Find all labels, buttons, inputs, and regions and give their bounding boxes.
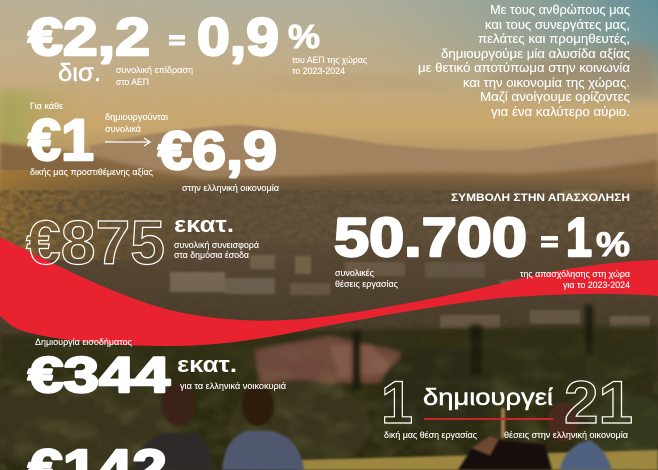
value 1 outlined: 1 (381, 369, 413, 436)
intro paragraph: με θετικό αποτύπωμα στην κοινωνία (418, 61, 630, 75)
caption share of employment: της απασχόλησης στη χώρα (520, 269, 630, 279)
caption percent of GDP: του ΑΕΠ της χώρας (292, 55, 368, 65)
city buildings (170, 190, 650, 330)
caption public revenue: συνολική συνεισφορά (174, 240, 259, 250)
people: couple on the right (458, 402, 612, 470)
intro paragraph: Μαζί ανοίγουμε ορίζοντες (480, 90, 630, 104)
value €1: €1 (28, 108, 94, 173)
caption GDP impact: συνολική επίδραση (116, 65, 193, 75)
intro paragraph (418, 3, 630, 119)
stat: GDP impact: στο ΑΕΠ (116, 77, 149, 87)
intro paragraph: για ένα καλύτερο αύριο. (491, 105, 630, 119)
value €344: €344 (28, 347, 170, 403)
word creates: δημιουργεί (423, 384, 553, 410)
intro paragraph: δημιουργούμε μία αλυσίδα αξίας (441, 47, 630, 61)
red underline (424, 418, 553, 420)
stat: employment: θέσεις εργασίας (335, 279, 399, 289)
stat: GDP impact: το 2023-2024 (292, 66, 345, 76)
stat: job multiplier (381, 369, 633, 440)
stat: employment: για το 2023-2024 (563, 280, 630, 290)
stat: public revenue (26, 209, 259, 278)
caption greek economy: στην ελληνική οικονομία (182, 183, 279, 193)
caption total jobs: συνολικές (335, 268, 375, 278)
stat: GDP impact (28, 8, 368, 87)
percent sign: % (288, 18, 320, 55)
stat: multiplier (28, 101, 279, 193)
heading: ΣΥΜΒΟΛΗ ΣΤΗΝ ΑΠΑΣΧΟΛΗΣΗ (451, 192, 630, 204)
intro paragraph: πελάτες και προμηθευτές, (478, 32, 630, 46)
percent sign: % (596, 226, 630, 264)
intro paragraph: Με τους ανθρώπους μας (490, 3, 630, 17)
stat: income creation (28, 337, 286, 470)
caption own job: δική μας θέση εργασίας (384, 430, 478, 440)
value €6,9: €6,9 (158, 121, 277, 181)
unit εκατ.: εκατ. (177, 352, 237, 377)
caption jobs in economy: θέσεις στην ελληνική οικονομία (504, 430, 628, 440)
red swoosh (0, 237, 658, 346)
label for every: Για κάθε (30, 101, 63, 111)
equals sign (541, 236, 558, 248)
arrow (105, 138, 150, 146)
value €875 outlined: €875 (26, 209, 165, 278)
trees and houses (0, 305, 658, 470)
intro paragraph: και την οικονομία της χώρας. (463, 76, 630, 90)
stat: multiplier: συνολικά (105, 124, 141, 134)
value 0,9: 0,9 (197, 8, 279, 67)
value 50.700: 50.700 (334, 206, 527, 268)
intro paragraph: και τους συνεργάτες μας, (485, 18, 630, 32)
people: two men seen from behind (135, 384, 304, 470)
equals sign (169, 35, 185, 46)
caption households: για τα ελληνικά νοικοκυριά (180, 381, 286, 391)
unit δισ.: δισ. (58, 59, 101, 87)
label: Δημιουργία εισοδήματος (35, 337, 133, 347)
stat: public revenue: στα δημόσια έσοδα (174, 250, 249, 260)
caption own value added: δικής μας προστιθέμενης αξίας (30, 167, 154, 177)
value €2,2: €2,2 (28, 8, 150, 67)
golden grass (300, 450, 658, 470)
caption created: δημιουργούνται (105, 112, 168, 122)
value 1: 1 (566, 206, 592, 268)
value 21 outlined: 21 (564, 369, 633, 436)
unit εκατ.: εκατ. (174, 212, 234, 237)
stat: employment (334, 192, 630, 290)
